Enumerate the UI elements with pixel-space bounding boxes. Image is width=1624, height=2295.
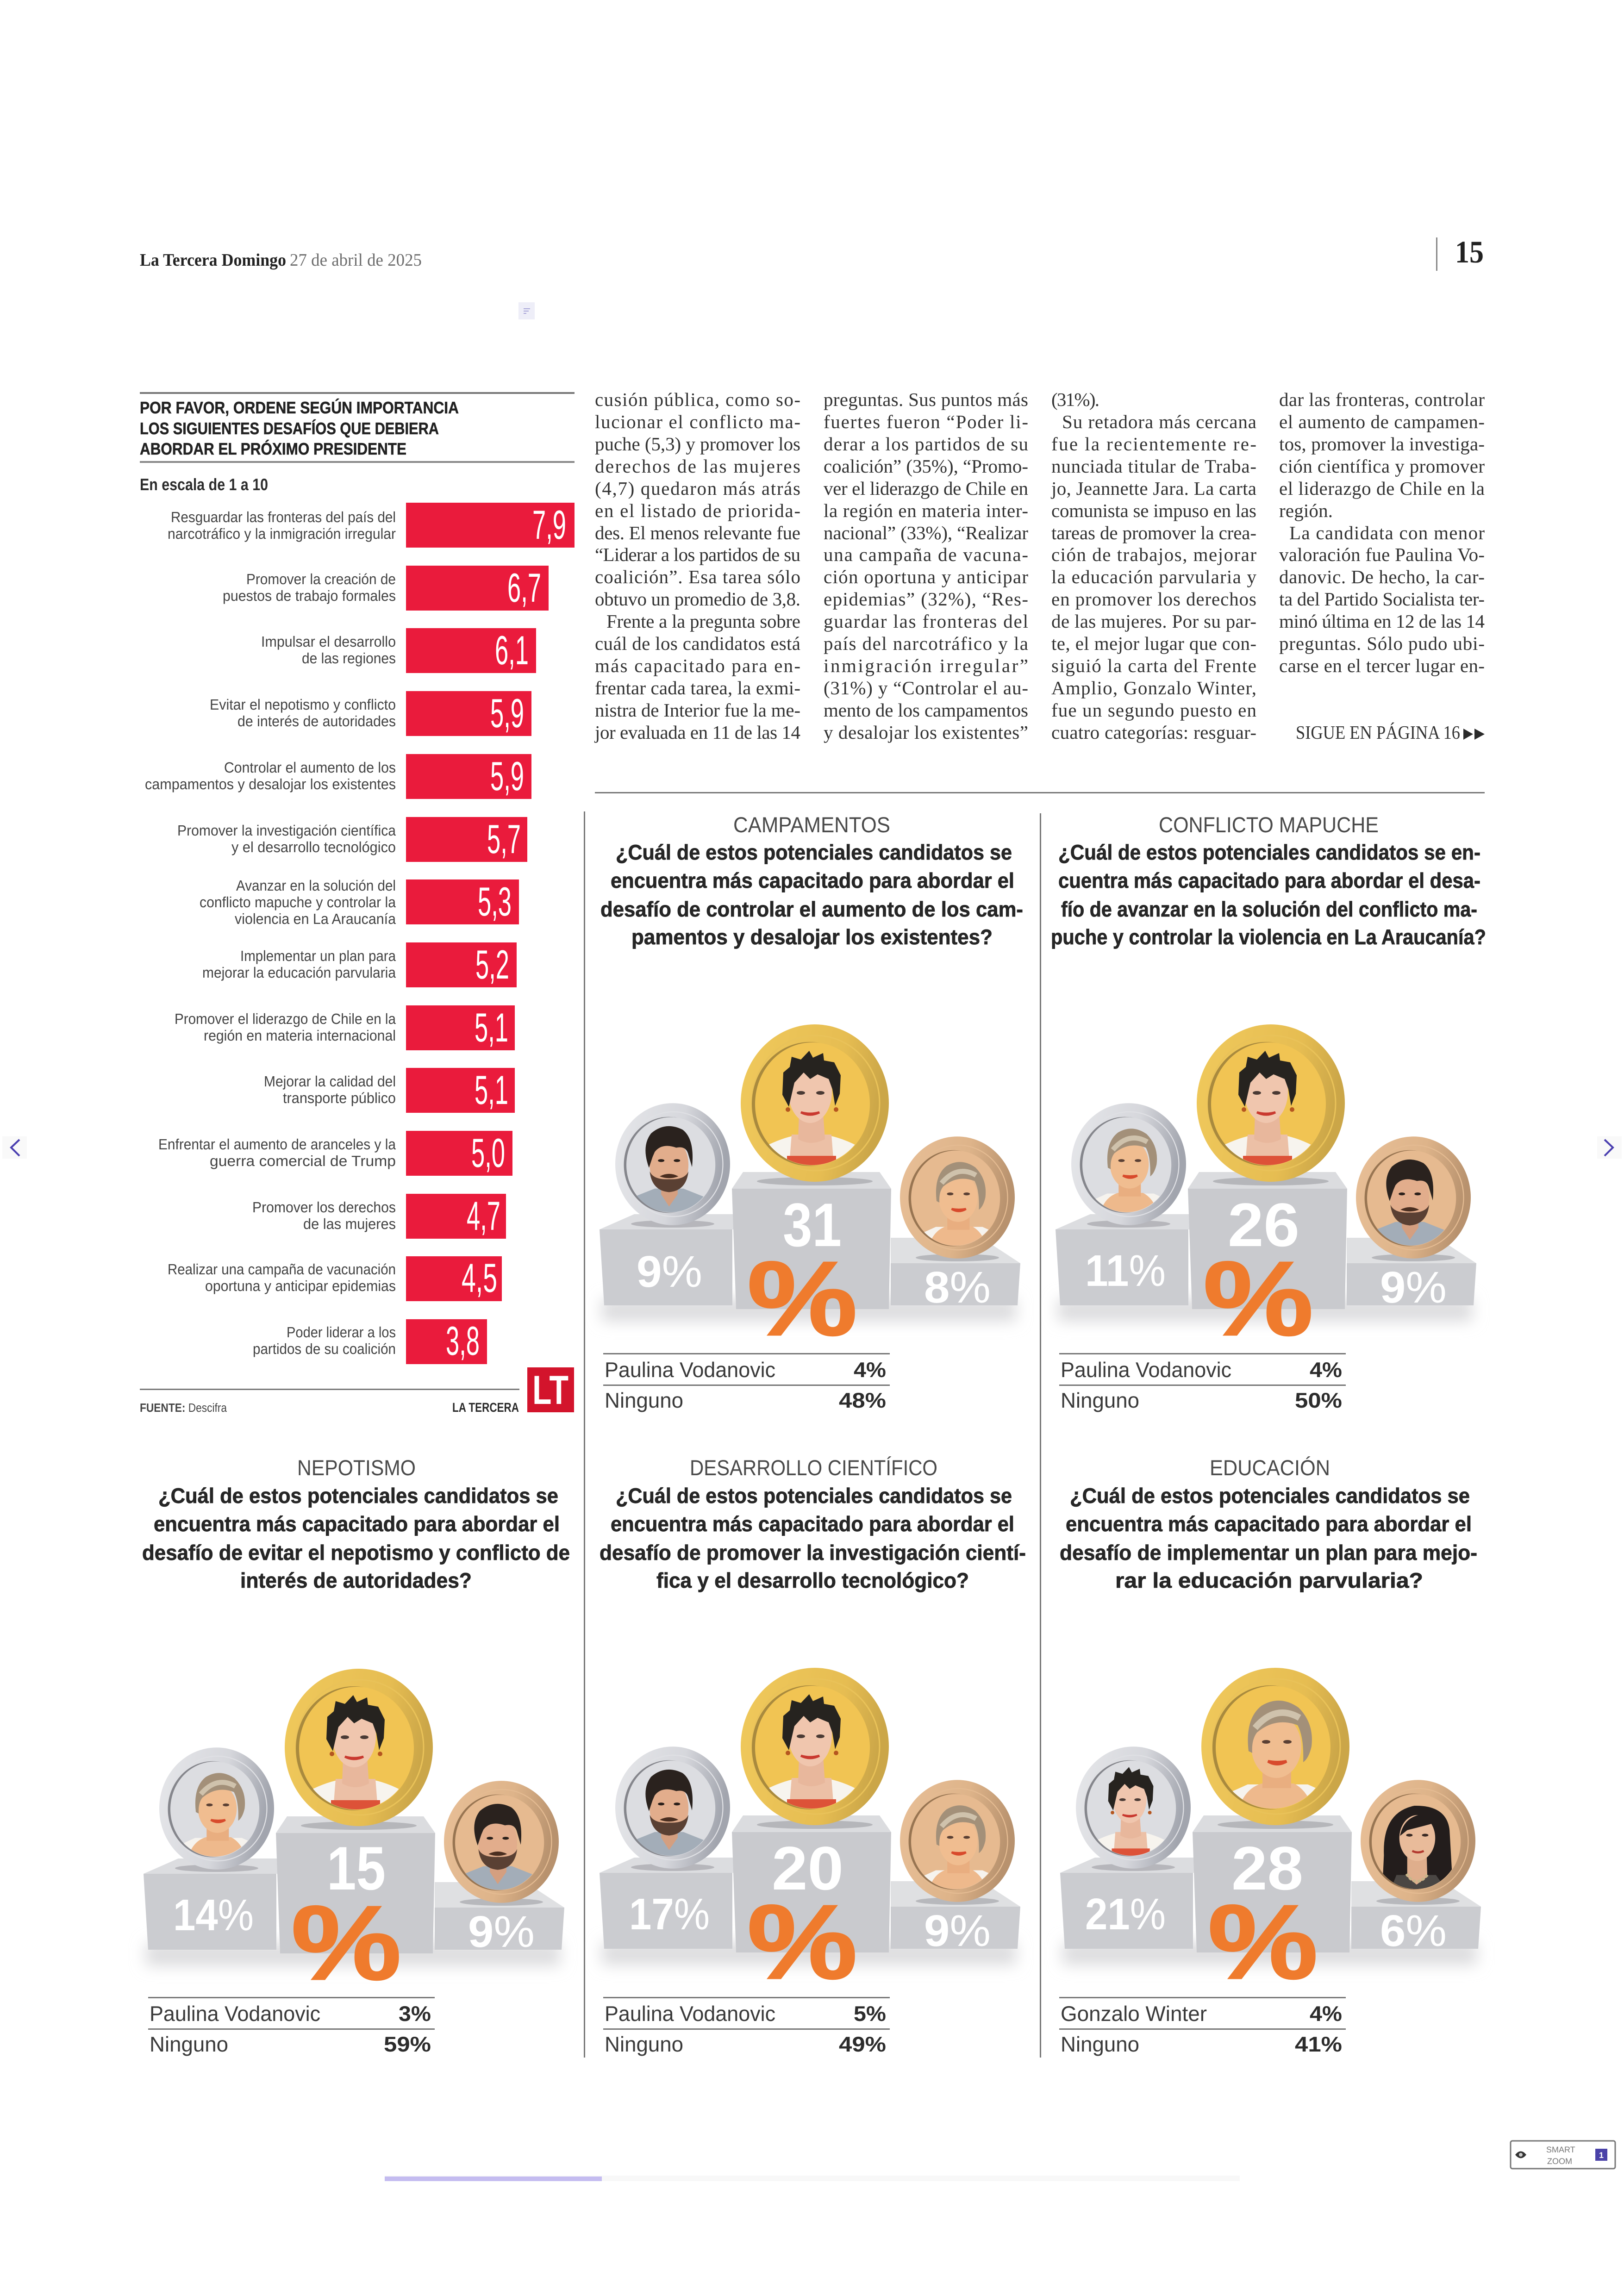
article text: column 4: tos, promover la investiga- (1279, 433, 1485, 455)
other candidates table (603, 1997, 890, 2056)
bar: resguardar fronteras 7,9 (168, 502, 575, 548)
bar: derechos de las mujeres 4,7: de las mujeres (303, 1216, 396, 1232)
bar: regiones 6,1: Impulsar el desarrollo (261, 633, 396, 650)
bar: nepotismo 5,9: Evitar el nepotismo y conflicto (210, 696, 396, 713)
article text: column 1: lucionar el conflicto ma- (595, 411, 800, 432)
article text: column 3: comunista se impuso en las (1051, 500, 1256, 521)
panel: campamentos (600, 812, 1023, 1412)
question: encuentra más capacitado para abordar el (611, 1512, 1014, 1536)
article text: column 4: preguntas. Sólo pudo ubi- (1279, 633, 1485, 654)
other candidates table: Ninguno (605, 2032, 683, 2056)
article text: column 3: fue la recientemente re- (1051, 433, 1256, 455)
first place value: 28 (1231, 1834, 1303, 1903)
article text: column 4: danovic. De hecho, la car- (1279, 566, 1485, 587)
bar: vacunación 4,5: oportuna y anticipar epidemias (205, 1278, 396, 1294)
other candidates table: Ninguno (1061, 1388, 1139, 1412)
question: interés de autoridades? (240, 1568, 472, 1592)
other candidates table: 50% (1295, 1388, 1342, 1412)
podium chart (144, 1669, 564, 2002)
question: ¿Cuál de estos potenciales candidatos se (158, 1484, 558, 1508)
bar: educación parvularia 5,2: Implementar un plan para (240, 948, 396, 964)
bar: conflicto mapuche 5,3: violencia en La Araucanía (235, 911, 396, 927)
article text: column 3: ción de trabajos, mejorar (1051, 544, 1256, 565)
article text: column 1: en el listado de priorida- (595, 500, 800, 521)
question: ¿Cuál de estos potenciales candidatos se (616, 840, 1012, 864)
article text: column 3: Amplio, Gonzalo Winter, (1051, 677, 1256, 698)
article text: column 2: preguntas. Sus puntos más (824, 389, 1028, 410)
article text: column 4: La candidata con menor (1289, 522, 1485, 543)
question: rar la educación parvularia? (1115, 1568, 1423, 1592)
bar: campamentos 5,9: campamentos y desalojar los existentes (145, 776, 396, 792)
third place value: 9% (924, 1906, 991, 1956)
question: encuentra más capacitado para abordar el (611, 868, 1014, 892)
coin: Jeannette Jara, bronze (900, 1780, 1015, 1902)
coin: Carolina Tohá, gold (1197, 1024, 1345, 1182)
article text: column 2: la región en materia inter- (824, 500, 1028, 521)
bar: investigación 5,7: Promover la investigación científica (177, 822, 396, 839)
arrow: next page (1597, 1136, 1622, 1159)
bar: derechos de las mujeres 4,7: Promover los derechos (252, 1199, 396, 1216)
podium chart (600, 1668, 1020, 2001)
bar: resguardar fronteras 7,9: 7,9 (532, 502, 566, 548)
article text: column 2: y desalojar los existentes” (824, 722, 1028, 743)
first place value: 20 (772, 1834, 843, 1903)
other candidates table: 3% (399, 2002, 431, 2026)
article text: column 2: inmigración irregular” (824, 655, 1028, 676)
second place value: 14% (173, 1890, 254, 1940)
article text: column 1: cusión pública, como so- (595, 389, 800, 410)
other candidates table: 59% (384, 2032, 431, 2056)
chart heading (140, 398, 459, 458)
bar: liderazgo regional 5,1: región en materia internacional (204, 1027, 396, 1044)
question: puche y controlar la violencia en La Araucanía? (1051, 925, 1486, 949)
second place value: 9% (637, 1247, 702, 1297)
progress bar (385, 2176, 1240, 2181)
article text: column 2: (31%) y “Controlar el au- (824, 677, 1028, 698)
masthead: publication and date: La Tercera Domingo (140, 250, 286, 270)
bar: conflicto mapuche 5,3 (200, 877, 519, 927)
article text: column 1: obtuvo un promedio de 3,8. (595, 588, 800, 610)
panel title: CONFLICTO MAPUCHE (1159, 812, 1379, 837)
bar: transporte público 5,1 (264, 1067, 515, 1113)
bar: transporte público 5,1: Mejorar la calidad del (264, 1073, 396, 1090)
bar: vacunación 4,5 (168, 1255, 502, 1301)
bar: regiones 6,1 (261, 627, 536, 673)
icon: small note marker (518, 302, 535, 319)
third place value: 6% (1380, 1906, 1447, 1956)
article text: column 1: frentar cada tarea, la exmi- (595, 677, 800, 698)
bar: liderazgo regional 5,1: Promover el liderazgo de Chile en la (175, 1010, 396, 1027)
third place value: 9% (468, 1907, 535, 1957)
article text: column 4: SIGUE EN PÁGINA 16 (1296, 722, 1460, 743)
coin: Gonzalo Winter, silver (615, 1103, 730, 1225)
bar: transporte público 5,1: transporte público (283, 1090, 396, 1106)
bar: empleo formal 6,7: 6,7 (507, 565, 541, 611)
other candidates table: Ninguno (1061, 2032, 1139, 2056)
masthead: publication and date (140, 250, 422, 270)
article text: column 2 (824, 389, 1028, 743)
article text: column 3: siguió la carta del Frente (1051, 655, 1256, 676)
panel title: DESARROLLO CIENTÍFICO (690, 1455, 937, 1480)
bar: coalición 3,8 (253, 1318, 487, 1364)
article text: column 1: coalición”. Esa tarea sólo (595, 566, 800, 587)
article text: column 1: cuál de los candidatos está (595, 633, 800, 654)
article text: column 4: el aumento de campamen- (1279, 411, 1485, 432)
percent sign: % (747, 1883, 857, 2001)
bar: nepotismo 5,9: de interés de autoridades (237, 713, 396, 730)
article text: column 2: coalición” (35%), “Promo- (824, 455, 1028, 477)
question: cuentra más capacitado para abordar el desa- (1058, 868, 1480, 892)
article text: column 4: región. (1279, 500, 1333, 521)
first place value: 15 (327, 1834, 386, 1903)
other candidates table: 41% (1295, 2032, 1342, 2056)
question: desafío de evitar el nepotismo y conflicto de (142, 1540, 570, 1565)
other candidates table: 49% (839, 2032, 886, 2056)
other candidates table: Ninguno (150, 2032, 228, 2056)
coin: Jeannette Jara, silver (1071, 1103, 1186, 1225)
bar: resguardar fronteras 7,9: Resguardar las fronteras del país del (171, 509, 396, 525)
coin: Jeannette Jara, bronze (900, 1136, 1015, 1259)
credit: LA TERCERA (452, 1400, 519, 1415)
second place value: 17% (629, 1890, 710, 1939)
article text: column 1: (4,7) quedaron más atrás (595, 478, 800, 499)
chart scale note: En escala de 1 a 10 (140, 475, 268, 494)
article text: column 4: ta del Partido Socialista ter- (1279, 588, 1485, 610)
bar: educación parvularia 5,2 (202, 942, 517, 987)
bar: vacunación 4,5: 4,5 (462, 1255, 497, 1301)
article text: column 3 (1050, 389, 1256, 743)
bar: nepotismo 5,9 (210, 690, 531, 736)
bar: aranceles 5,0: 5,0 (471, 1130, 505, 1176)
panel title: NEPOTISMO (297, 1455, 416, 1480)
question (600, 1484, 1026, 1592)
question: ¿Cuál de estos potenciales candidatos se en- (1058, 840, 1480, 864)
bar: conflicto mapuche 5,3: Avanzar en la solución del (236, 877, 396, 894)
bar: investigación 5,7 (177, 816, 527, 862)
article text: column 1 (594, 389, 800, 743)
panel: educación (1059, 1455, 1481, 2056)
chart heading: POR FAVOR, ORDENE SEGÚN IMPORTANCIA (140, 398, 459, 417)
article text: column 3: nunciada titular de Traba- (1051, 455, 1256, 477)
other candidates table: 4% (854, 1358, 886, 1382)
article text: column 3: te, el mejor lugar que con- (1051, 633, 1256, 654)
coin: Paulina Vodanovic, bronze (1361, 1780, 1475, 1902)
article text: column 1: derechos de las mujeres (595, 455, 800, 477)
coin: Gonzalo Winter, bronze (1356, 1136, 1471, 1259)
question (1051, 840, 1486, 949)
chart heading: ABORDAR EL PRÓXIMO PRESIDENTE (140, 439, 406, 458)
bar: investigación 5,7: 5,7 (487, 816, 521, 862)
coin: Carolina Tohá, gold (285, 1669, 433, 1826)
article text: column 2: país del narcotráfico y la (824, 633, 1028, 654)
bar: nepotismo 5,9: 5,9 (490, 690, 524, 736)
article text: column 3: cuatro categorías: resguar- (1051, 722, 1256, 743)
bar: empleo formal 6,7: puestos de trabajo formales (223, 587, 396, 604)
article text: column 4: minó última en 12 de las 14 (1279, 611, 1485, 632)
bar: coalición 3,8: 3,8 (446, 1318, 480, 1364)
article text: column 1: jor evaluada en 11 de las 14 (594, 722, 800, 743)
article text: column 3: (31%). (1051, 389, 1099, 410)
percent sign: % (291, 1884, 401, 2002)
article text: column 4: valoración fue Paulina Vo- (1279, 544, 1485, 565)
bar: aranceles 5,0 (158, 1130, 512, 1176)
article text: column 1: Frente a la pregunta sobre (606, 611, 800, 632)
article text: column 2: epidemias” (32%), “Res- (824, 588, 1028, 610)
first place value: 31 (783, 1191, 842, 1260)
article text: column 2: mento de los campamentos (824, 699, 1028, 721)
bar: coalición 3,8: Poder liderar a los (287, 1324, 396, 1341)
article text: column 1: “Liderar a los partidos de su (595, 544, 800, 565)
article text: column 4: el liderazgo de Chile en la (1279, 478, 1485, 499)
podium chart (1056, 1024, 1476, 1358)
panel: conflicto mapuche (1051, 812, 1486, 1412)
bar: campamentos 5,9: Controlar el aumento de los (224, 759, 396, 776)
article text: column 3: la educación parvularia y (1051, 566, 1256, 587)
bar: campamentos 5,9: 5,9 (490, 753, 524, 799)
article text: column 2: ción oportuna y anticipar (824, 566, 1028, 587)
masthead: publication and date: 27 de abril de 2025 (290, 250, 422, 270)
bar: educación parvularia 5,2: mejorar la educación parvularia (202, 964, 396, 981)
bar: educación parvularia 5,2: 5,2 (475, 942, 509, 987)
bar: investigación 5,7: y el desarrollo tecnológico (231, 839, 396, 855)
question: desafío de promover la investigación cientí- (600, 1540, 1026, 1565)
smart zoom control: 1 (1599, 2151, 1604, 2160)
bar: vacunación 4,5: Realizar una campaña de vacunación (168, 1261, 396, 1278)
bar: campamentos 5,9 (145, 753, 531, 799)
coin: Jeannette Jara, silver (159, 1747, 274, 1870)
article text: column 2: una campaña de vacuna- (824, 544, 1028, 565)
question: fica y el desarrollo tecnológico? (656, 1568, 969, 1592)
podium chart (600, 1024, 1020, 1358)
coin: Carolina Tohá, silver (1076, 1746, 1191, 1869)
bar: empleo formal 6,7 (223, 565, 549, 611)
other candidates table (148, 1997, 435, 2056)
bar: conflicto mapuche 5,3: conflicto mapuche y controlar la (200, 894, 396, 911)
coin: Jeannette Jara, gold (1201, 1668, 1349, 1825)
bar: derechos de las mujeres 4,7: 4,7 (467, 1193, 500, 1239)
question: ¿Cuál de estos potenciales candidatos se (616, 1484, 1012, 1508)
smart zoom control (1511, 2141, 1615, 2169)
article text: column 2: derar a los partidos de su (824, 433, 1028, 455)
percent sign: % (747, 1240, 857, 1358)
article text: column 1: puche (5,3) y promover los (595, 433, 800, 455)
article text: column 1: des. El menos relevante fue (595, 522, 800, 543)
panel: desarrollo científico (600, 1455, 1026, 2056)
question: fío de avanzar en la solución del conflicto ma- (1061, 897, 1477, 921)
arrow: previous page (2, 1136, 27, 1159)
other candidates table: 4% (1310, 1358, 1342, 1382)
bar: liderazgo regional 5,1: 5,1 (475, 1004, 508, 1050)
bar: liderazgo regional 5,1 (175, 1004, 515, 1050)
percent sign: % (1203, 1240, 1313, 1358)
percent sign: % (1208, 1883, 1318, 2001)
other candidates table: Paulina Vodanovic (605, 2002, 775, 2026)
article text: column 4: carse en el tercer lugar en- (1279, 655, 1485, 676)
article text: column 3: jo, Jeannette Jara. La carta (1050, 478, 1256, 499)
other candidates table: Paulina Vodanovic (150, 2002, 320, 2026)
question: pamentos y desalojar los existentes? (631, 925, 993, 949)
panel: nepotismo (142, 1455, 570, 2056)
other candidates table: Paulina Vodanovic (1061, 1358, 1231, 1382)
bar: conflicto mapuche 5,3: 5,3 (478, 879, 512, 924)
question: ¿Cuál de estos potenciales candidatos se (1070, 1484, 1470, 1508)
article text: column 3: fue un segundo puesto en (1051, 699, 1256, 721)
coin: Gonzalo Winter, bronze (444, 1781, 559, 1903)
article text: column 1: más capacitado para en- (595, 655, 800, 676)
question: encuentra más capacitado para abordar el (1066, 1512, 1472, 1536)
bar: derechos de las mujeres 4,7 (252, 1193, 506, 1239)
question: desafío de controlar el aumento de los cam- (600, 897, 1023, 921)
panel: importance ranking chart (140, 392, 575, 1415)
third place value: 9% (1380, 1263, 1447, 1312)
article text: column 3: Su retadora más cercana (1062, 411, 1256, 432)
question (142, 1484, 570, 1592)
question (1060, 1484, 1477, 1592)
article text: column 3: tareas de promover la crea- (1051, 522, 1256, 543)
first place value: 26 (1228, 1191, 1299, 1260)
other candidates table (603, 1353, 890, 1412)
page number (1436, 234, 1484, 271)
article text: column 3: de las mujeres. Por su par- (1051, 611, 1256, 632)
bar: regiones 6,1: 6,1 (495, 627, 529, 673)
bar: coalición 3,8: partidos de su coalición (253, 1341, 396, 1357)
question (600, 840, 1023, 949)
other candidates table (1059, 1353, 1346, 1412)
logo: LT: LT (532, 1367, 568, 1413)
question: desafío de implementar un plan para mejo- (1060, 1540, 1477, 1565)
other candidates table: Gonzalo Winter (1061, 2002, 1207, 2026)
article text: column 2: ver el liderazgo de Chile en (824, 478, 1028, 499)
second place value: 11% (1085, 1246, 1166, 1296)
podium chart (1060, 1668, 1481, 2001)
article text: column 2: nacional” (33%), “Realizar (824, 522, 1028, 543)
other candidates table: 48% (839, 1388, 886, 1412)
third place value: 8% (924, 1263, 991, 1312)
article text: column 4 (1279, 389, 1485, 743)
other candidates table: Ninguno (605, 1388, 683, 1412)
second place value: 21% (1085, 1890, 1166, 1939)
other candidates table (1059, 1997, 1346, 2056)
source note: FUENTE: Descifra (140, 1401, 227, 1415)
page number: 15 (1455, 234, 1484, 269)
question: encuentra más capacitado para abordar el (154, 1512, 560, 1536)
icon: eye (1515, 2152, 1526, 2158)
article text: column 1: nistra de Interior fue la me- (595, 699, 800, 721)
article text: column 4: dar las fronteras, controlar (1279, 389, 1485, 410)
article text: column 3: en promover los derechos (1051, 588, 1256, 610)
chart heading: LOS SIGUIENTES DESAFÍOS QUE DEBIERA (140, 419, 439, 438)
smart zoom control: SMART (1546, 2145, 1575, 2154)
bar: regiones 6,1: de las regiones (302, 650, 396, 667)
article text: column 2: fuertes fueron “Poder li- (824, 411, 1028, 432)
bar: aranceles 5,0: Enfrentar el aumento de aranceles y la (158, 1136, 396, 1153)
smart zoom control: ZOOM (1547, 2157, 1572, 2166)
panel title: CAMPAMENTOS (733, 812, 890, 837)
article text: column 2: guardar las fronteras del (824, 611, 1028, 632)
article text: column 4: ción científica y promover (1279, 455, 1485, 477)
panel title: EDUCACIÓN (1210, 1455, 1330, 1480)
other candidates table: 4% (1310, 2002, 1342, 2026)
other candidates table: 5% (854, 2002, 886, 2026)
bar: empleo formal 6,7: Promover la creación de (246, 571, 396, 587)
coin: Carolina Tohá, gold (741, 1668, 889, 1825)
bar: transporte público 5,1: 5,1 (475, 1067, 508, 1113)
bar: aranceles 5,0: guerra comercial de Trump (210, 1153, 396, 1169)
coin: Carolina Tohá, gold (741, 1024, 889, 1182)
bar: resguardar fronteras 7,9: narcotráfico y la inmigración irregular (168, 525, 396, 542)
other candidates table: Paulina Vodanovic (605, 1358, 775, 1382)
coin: Gonzalo Winter, silver (615, 1746, 730, 1869)
